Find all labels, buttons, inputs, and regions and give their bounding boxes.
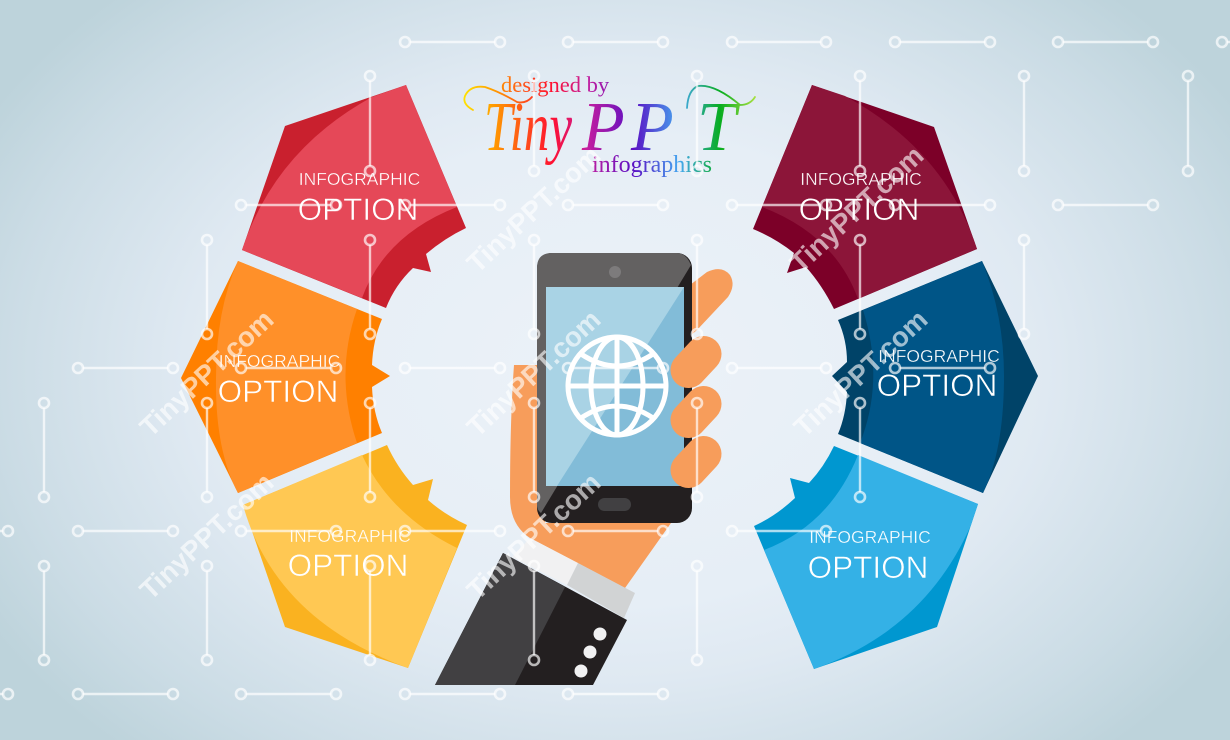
sleeve buttons [574,628,606,678]
heading: yellow label: INFOGRAPHIC [289,526,411,546]
panel: navy option [832,261,1038,493]
phone screen [546,287,684,486]
heading: yellow option: OPTION [288,547,408,583]
shirt cuff [512,538,578,585]
panel: maroon option [753,85,977,309]
top finger [690,269,733,336]
watermarks [134,140,933,606]
fingers [663,329,729,495]
panel: red option [242,85,466,308]
watermarks: TinyPPT.com [788,304,933,443]
heading: maroon label: INFOGRAPHIC [800,169,922,189]
heading: cyan option: OPTION [808,549,928,585]
heading: orange label: INFOGRAPHIC [219,351,340,371]
phone body [537,253,692,523]
heading: cyan label: INFOGRAPHIC [809,527,931,547]
icon: globe [568,337,666,435]
phone camera [609,266,621,278]
logo wordmark PPT: P [581,89,625,166]
watermarks: TinyPPT.com [784,140,929,279]
heading: navy option: OPTION [877,367,997,403]
panel: yellow option [243,445,467,668]
heading: maroon option: OPTION [799,191,919,227]
logo: designed by TinyPPT infographics [464,72,755,178]
icon: hand holding phone [435,253,733,685]
phone home button [598,498,631,511]
logo wordmark Tiny: Tiny [484,89,573,166]
watermarks: TinyPPT.com [134,304,279,443]
heading: navy label: INFOGRAPHIC [878,346,1000,366]
heading: orange option: OPTION [218,373,338,409]
panel: cyan option [754,446,978,669]
logo wordmark PPT: P [630,89,674,166]
logo wordmark PPT: T [697,89,741,166]
palm and thumb [510,365,671,588]
watermarks: TinyPPT.com [134,467,279,606]
logo swashes [464,86,755,110]
panel: orange option [181,261,390,493]
watermarks: TinyPPT.com [461,304,606,443]
logo caption bottom: infographics [592,152,712,178]
watermarks: TinyPPT.com [461,467,606,606]
logo caption top: designed by [501,72,610,97]
heading: red label: INFOGRAPHIC [299,169,420,189]
heading: red option: OPTION [298,191,418,227]
sleeve [435,553,627,685]
watermarks: TinyPPT.com [461,140,606,279]
